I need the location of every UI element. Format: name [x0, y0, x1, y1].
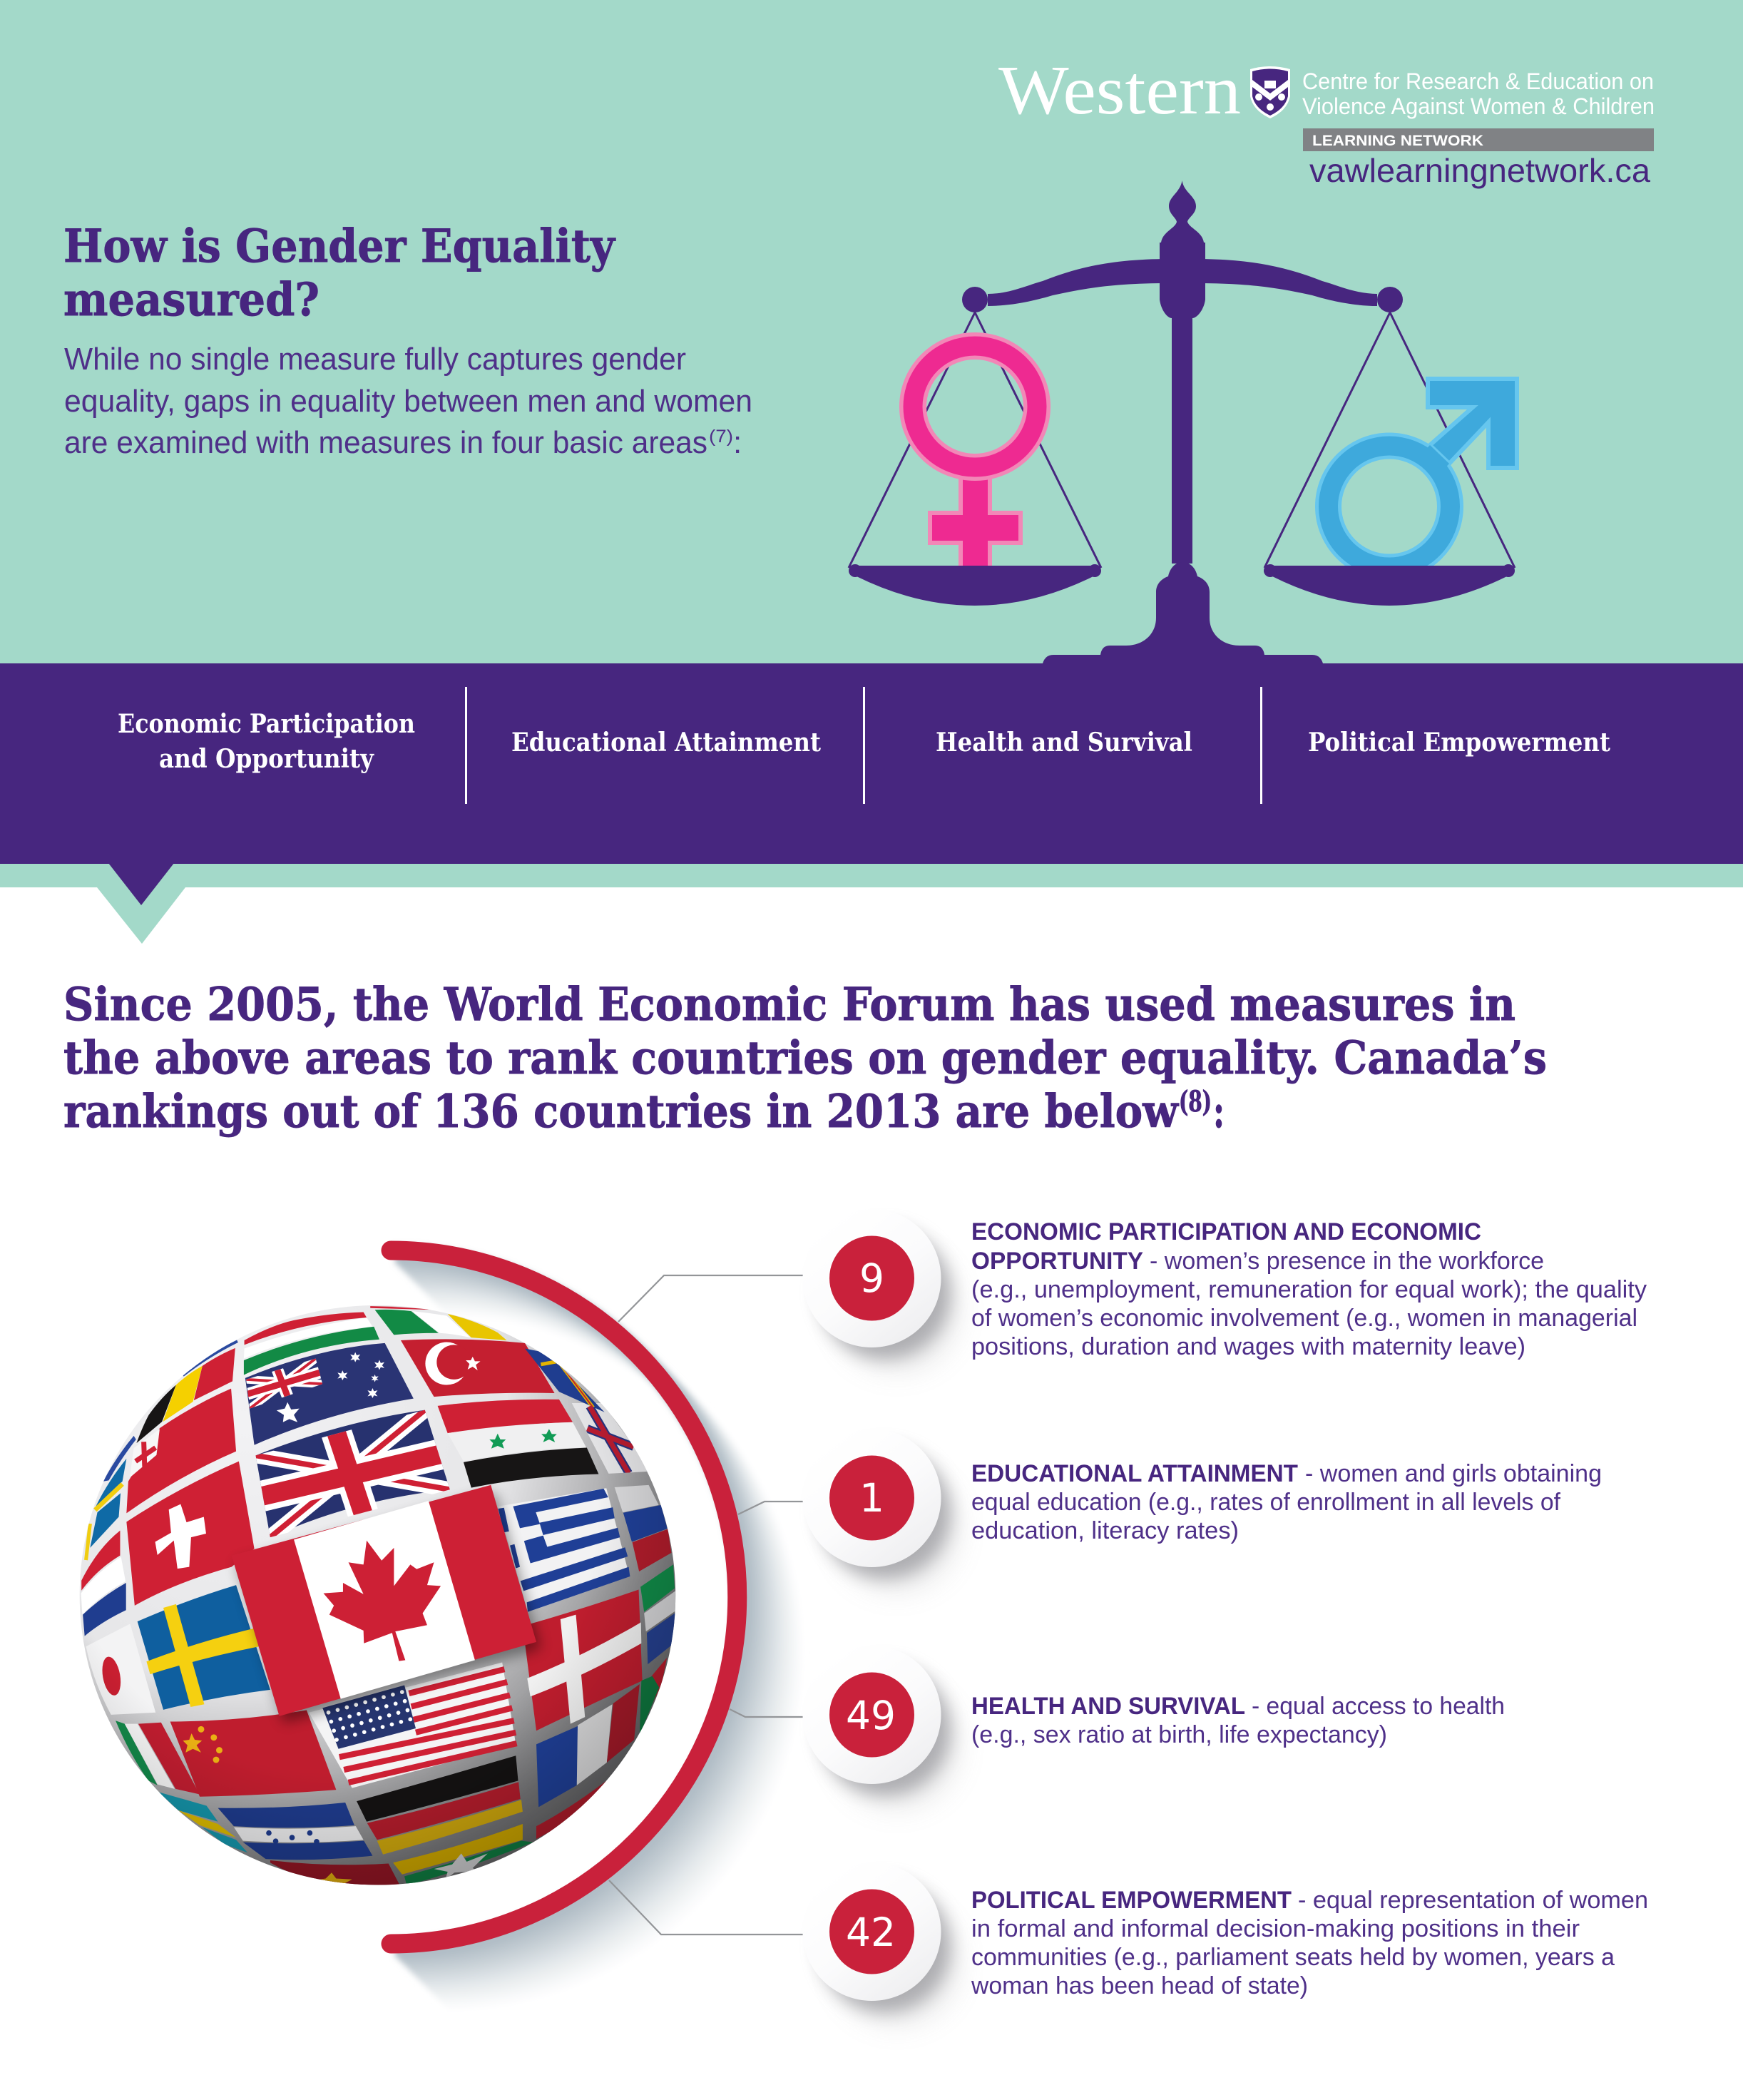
- text block: educational attainment: - women and girls obtaining: [1305, 1460, 1602, 1487]
- arrow: mint pointer: [97, 887, 185, 944]
- strings: left pan: [849, 312, 1101, 568]
- text block: political empowerment: woman has been head of state): [971, 1972, 1308, 1999]
- flag: lower-left tricolour: [116, 1721, 158, 1785]
- flag: denmark: [523, 1590, 643, 1731]
- heading: world economic forum: Since 2005, the World Economic Forum has used measures in: [63, 978, 1515, 1031]
- text block: economic participation: ECONOMIC PARTICIPATION AND ECONOMIC: [971, 1218, 1481, 1245]
- icon: female symbol: [913, 346, 1037, 571]
- intro paragraph: are examined with measures in four basic areas: [64, 425, 707, 460]
- heading: world economic forum: (8): [1179, 1085, 1212, 1118]
- text block: educational attainment: EDUCATIONAL ATTAINMENT: [971, 1460, 1298, 1487]
- scale finial and post: [1160, 180, 1205, 564]
- text block: economic participation: (e.g., unemployment, remuneration for equal work); the quality: [971, 1276, 1647, 1303]
- rank badge: educational attainment: [803, 1429, 958, 1590]
- heading: world economic forum: the above areas to rank countries on gender equality. Canada’s: [63, 1031, 1547, 1085]
- logo: centre name: Centre for Research & Education on: [1302, 68, 1654, 94]
- flag: black yellow red: [136, 1385, 176, 1443]
- text block: educational attainment: [971, 1460, 1602, 1544]
- illustration: balance scale: [849, 180, 1517, 666]
- flag: china: [170, 1711, 336, 1797]
- flag: turkey: [401, 1339, 555, 1397]
- flag: left blue yellow: [95, 1459, 126, 1508]
- rank badge: economic participation: [803, 1209, 958, 1370]
- intro paragraph: equality, gaps in equality between men and women: [64, 384, 752, 419]
- flag: syria: [438, 1400, 573, 1433]
- connector lines: [609, 1275, 806, 1935]
- logo: Western: Violence Against Women & Children: [1302, 93, 1655, 119]
- scale beam: [962, 259, 1403, 312]
- learning network bar: LEARNING NETWORK: [1312, 133, 1483, 149]
- flags: top row: [245, 1312, 367, 1345]
- rank badge: political empowerment: [803, 1862, 958, 2024]
- label: educational attainment: Educational Attainment: [511, 728, 821, 758]
- rank badge: political empowerment: 42: [846, 1910, 896, 1955]
- logo: Western: [998, 52, 1655, 128]
- globe shading: [70, 1290, 689, 1899]
- heading: How is Gender Equality measured: How is Gender Equality: [63, 220, 616, 273]
- text block: economic participation: positions, duration and wages with maternity leave): [971, 1333, 1525, 1360]
- text block: political empowerment: [971, 1887, 1648, 1999]
- learning network bar: [1303, 128, 1654, 151]
- text block: political empowerment: POLITICAL EMPOWERMENT: [971, 1887, 1292, 1914]
- rank badge: health and survival: [803, 1646, 958, 1807]
- text block: health and survival: HEALTH AND SURVIVAL: [971, 1693, 1245, 1720]
- intro paragraph: (7): [709, 427, 733, 447]
- flag: france: [536, 1726, 578, 1807]
- flag: right tricolour stack: [615, 1485, 659, 1512]
- heading: world economic forum: :: [1213, 1085, 1225, 1138]
- heading: How is Gender Equality measured: [63, 220, 616, 327]
- logo wordmark: Western: [998, 52, 1241, 128]
- flag: sweden: [138, 1585, 270, 1710]
- flag: bottom red: [270, 1860, 400, 1887]
- rank badge: health and survival: 49: [846, 1693, 896, 1738]
- text block: political empowerment: - equal representation of women: [1298, 1887, 1648, 1914]
- text block: economic participation: OPPORTUNITY: [971, 1248, 1143, 1275]
- flag: myanmar: [393, 1824, 523, 1875]
- red arc: [391, 1250, 737, 1944]
- flag: blue with yellow cross: [525, 1348, 605, 1412]
- text block: economic participation: of women’s economic involvement (e.g., women in managerial: [971, 1305, 1637, 1332]
- flag: teal yellow: [159, 1792, 218, 1822]
- website url: vawlearningnetwork.ca: [1309, 152, 1650, 189]
- icon: male symbol: [1328, 379, 1517, 567]
- flag: red with white canton: [126, 1389, 236, 1513]
- intro paragraph: [64, 342, 752, 460]
- text block: economic participation: [971, 1218, 1647, 1360]
- heading: world economic forum: [63, 978, 1547, 1138]
- icon: maple leaf: [324, 1541, 441, 1661]
- flag: nordic cross: [572, 1403, 653, 1474]
- arc shadow: [395, 1255, 793, 1999]
- globe of flags: [70, 1290, 689, 1899]
- label: economic participation: and Opportunity: [159, 744, 374, 774]
- label: economic participation: Economic Participation: [118, 709, 415, 739]
- icon: university crest: [1250, 66, 1290, 118]
- text block: health and survival: - equal access to health: [1252, 1693, 1505, 1720]
- rank badge: educational attainment: 1: [859, 1475, 884, 1521]
- text block: political empowerment: communities (e.g., parliament seats held by women, years a: [971, 1944, 1615, 1971]
- scale base: [1042, 562, 1324, 666]
- flag: germany: [357, 1755, 518, 1822]
- left pan: [849, 564, 1101, 606]
- heading: How is Gender Equality measured: measured?: [63, 273, 320, 327]
- flag: united kingdom: [255, 1410, 450, 1537]
- right pan: [1264, 564, 1515, 606]
- heading: world economic forum: rankings out of 136 countries in 2013 are below: [63, 1085, 1180, 1138]
- flag: canada: [232, 1485, 536, 1716]
- label: economic participation: [118, 709, 415, 774]
- flag: japan: [86, 1624, 155, 1715]
- flag: honduras: [218, 1803, 354, 1828]
- text block: health and survival: (e.g., sex ratio at birth, life expectancy): [971, 1721, 1387, 1748]
- label: health and survival: Health and Survival: [936, 728, 1192, 758]
- flag: greece: [498, 1488, 630, 1612]
- text block: educational attainment: education, literacy rates): [971, 1517, 1239, 1544]
- flag: australia: [245, 1343, 414, 1445]
- intro paragraph: While no single measure fully captures gender: [64, 342, 686, 377]
- intro paragraph: :: [733, 425, 742, 460]
- panel: purple band of four areas: [0, 663, 1743, 864]
- flag: switzerland: [126, 1462, 255, 1606]
- flag: canada shadow: [236, 1492, 541, 1723]
- text block: economic participation: - women’s presence in the workforce: [1150, 1248, 1544, 1275]
- rank badge: economic participation: 9: [859, 1255, 884, 1301]
- flag: usa: [309, 1663, 516, 1788]
- flag: left tricolour: [81, 1531, 120, 1591]
- text block: educational attainment: equal education (e.g., rates of enrollment in all levels of: [971, 1489, 1561, 1516]
- arrow: purple pointer: [108, 863, 174, 905]
- background: mint header: [0, 0, 1743, 887]
- label: political empowerment: Political Empowerment: [1308, 728, 1610, 758]
- strings: right pan: [1264, 312, 1515, 568]
- text block: health and survival: [971, 1693, 1505, 1748]
- text block: political empowerment: in formal and informal decision-making positions in their: [971, 1915, 1580, 1942]
